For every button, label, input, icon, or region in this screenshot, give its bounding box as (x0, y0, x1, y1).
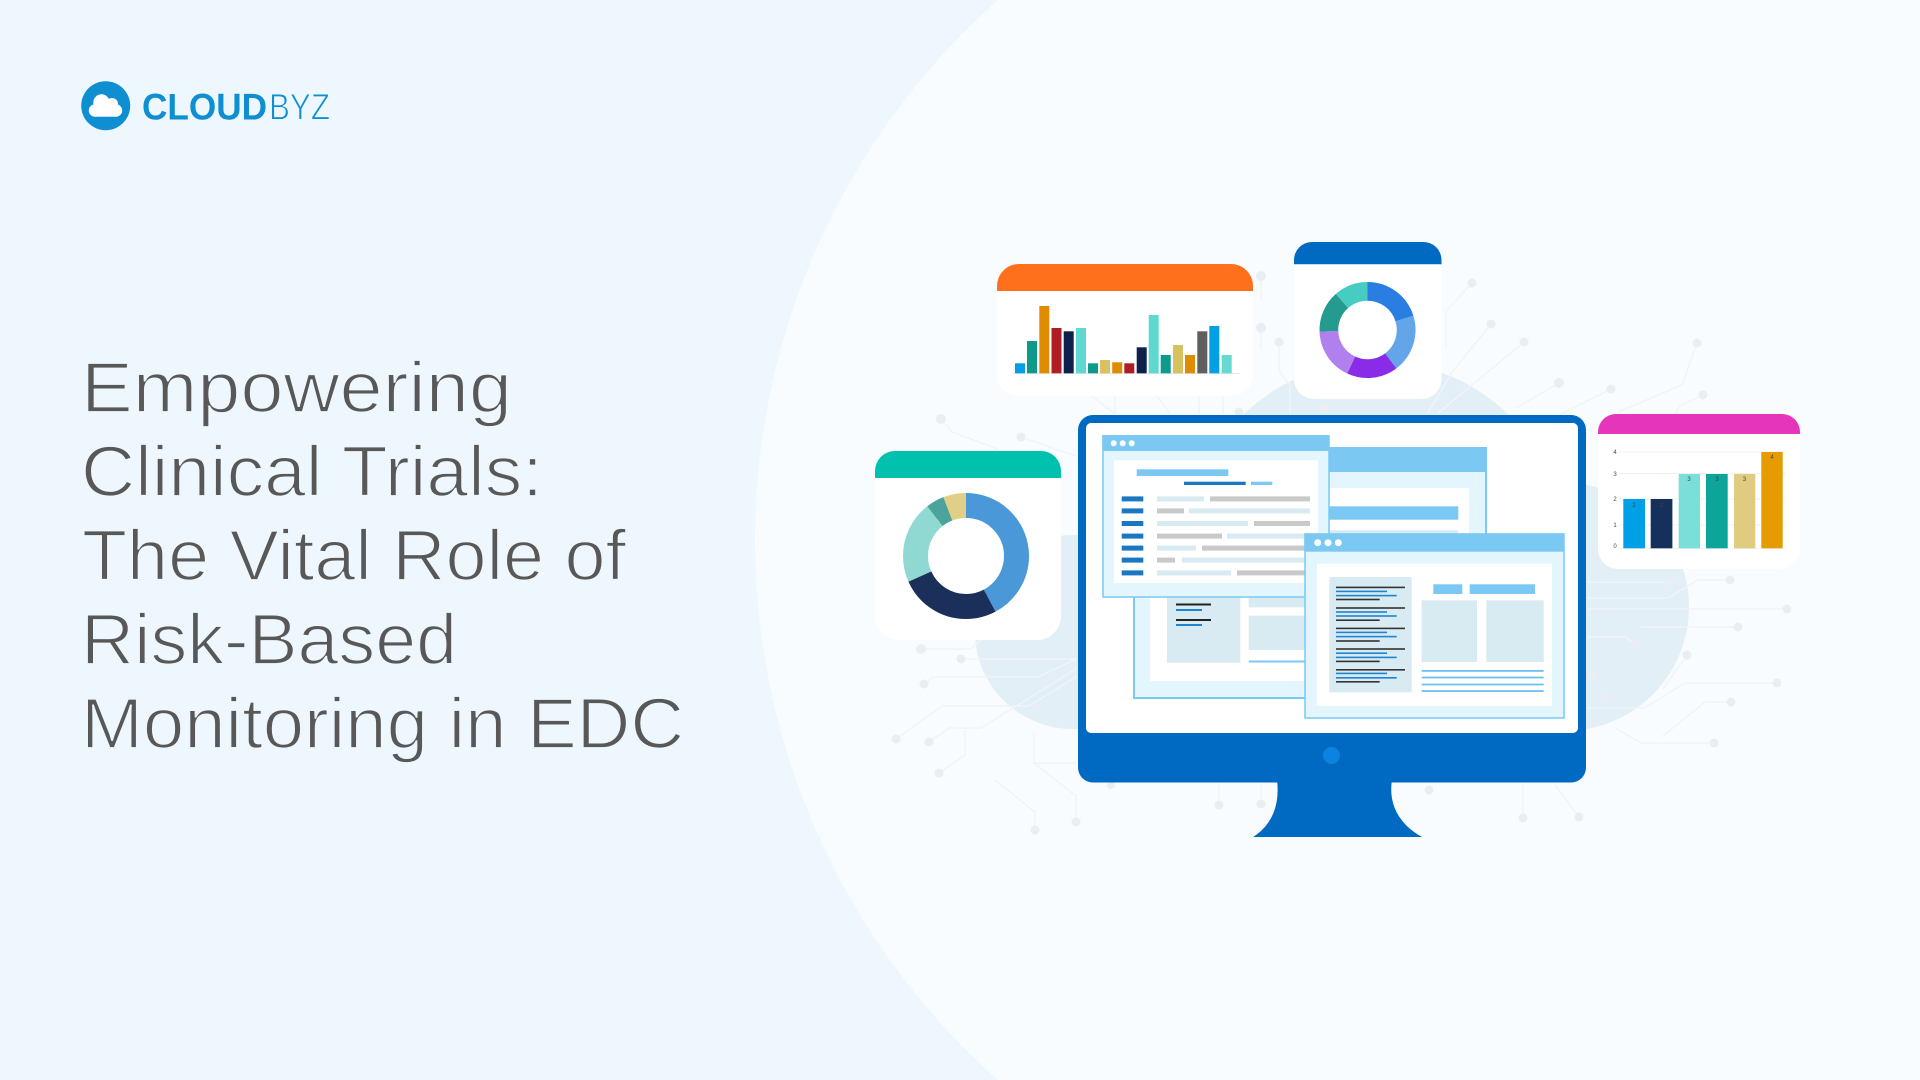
logo wordmark: CLOUD (142, 86, 267, 127)
circuit lines decoration (892, 271, 1792, 834)
monitor (1078, 415, 1586, 837)
chart axis and value labels: 2 (1660, 503, 1664, 509)
bar chart: six bars (1613, 450, 1786, 550)
chart axis and value labels: 3 (1715, 477, 1719, 483)
title (81, 349, 684, 764)
monitor stand (1253, 780, 1422, 837)
chart axis and value labels: 2 (1632, 503, 1636, 509)
title: Monitoring in EDC (81, 685, 684, 764)
logo wordmark: BYZ (269, 86, 330, 127)
monitor body (1078, 415, 1586, 782)
window: table (1102, 435, 1329, 597)
document text column (1329, 577, 1412, 692)
chart axis and value labels: 3 (1743, 477, 1747, 483)
bar chart: many bars (1013, 306, 1240, 374)
title: Empowering (81, 349, 512, 428)
panel: orange bar chart card (997, 264, 1253, 396)
background cloud shape (975, 361, 1689, 743)
chart axis and value labels: 2 (1613, 497, 1617, 503)
donut chart: purple and blue (1329, 291, 1406, 369)
window: document (1304, 533, 1564, 718)
panel: pink bar chart card (1598, 414, 1800, 569)
title: Clinical Trials: (81, 433, 543, 512)
chart axis and value labels (1613, 450, 1774, 550)
title: The Vital Role of (82, 517, 626, 596)
monitor power button (1323, 747, 1340, 764)
chart axis and value labels: 3 (1613, 472, 1617, 478)
chart axis and value labels: 4 (1613, 450, 1617, 456)
logo: Cloudbyz (81, 81, 330, 130)
window: back (1133, 447, 1487, 698)
donut chart: blue and navy (916, 506, 1016, 606)
panel: teal donut card (875, 451, 1061, 640)
chart axis and value labels: 4 (1770, 455, 1774, 461)
icon: cloud in circle (81, 81, 130, 130)
chart axis and value labels: 0 (1613, 544, 1617, 550)
panel: blue donut card (1294, 242, 1442, 399)
chart axis and value labels: 1 (1613, 523, 1617, 529)
monitor screen (1086, 423, 1578, 733)
title: Risk-Based (81, 601, 457, 680)
background: large pale circle (755, 0, 1920, 1080)
chart axis and value labels: 3 (1687, 477, 1691, 483)
